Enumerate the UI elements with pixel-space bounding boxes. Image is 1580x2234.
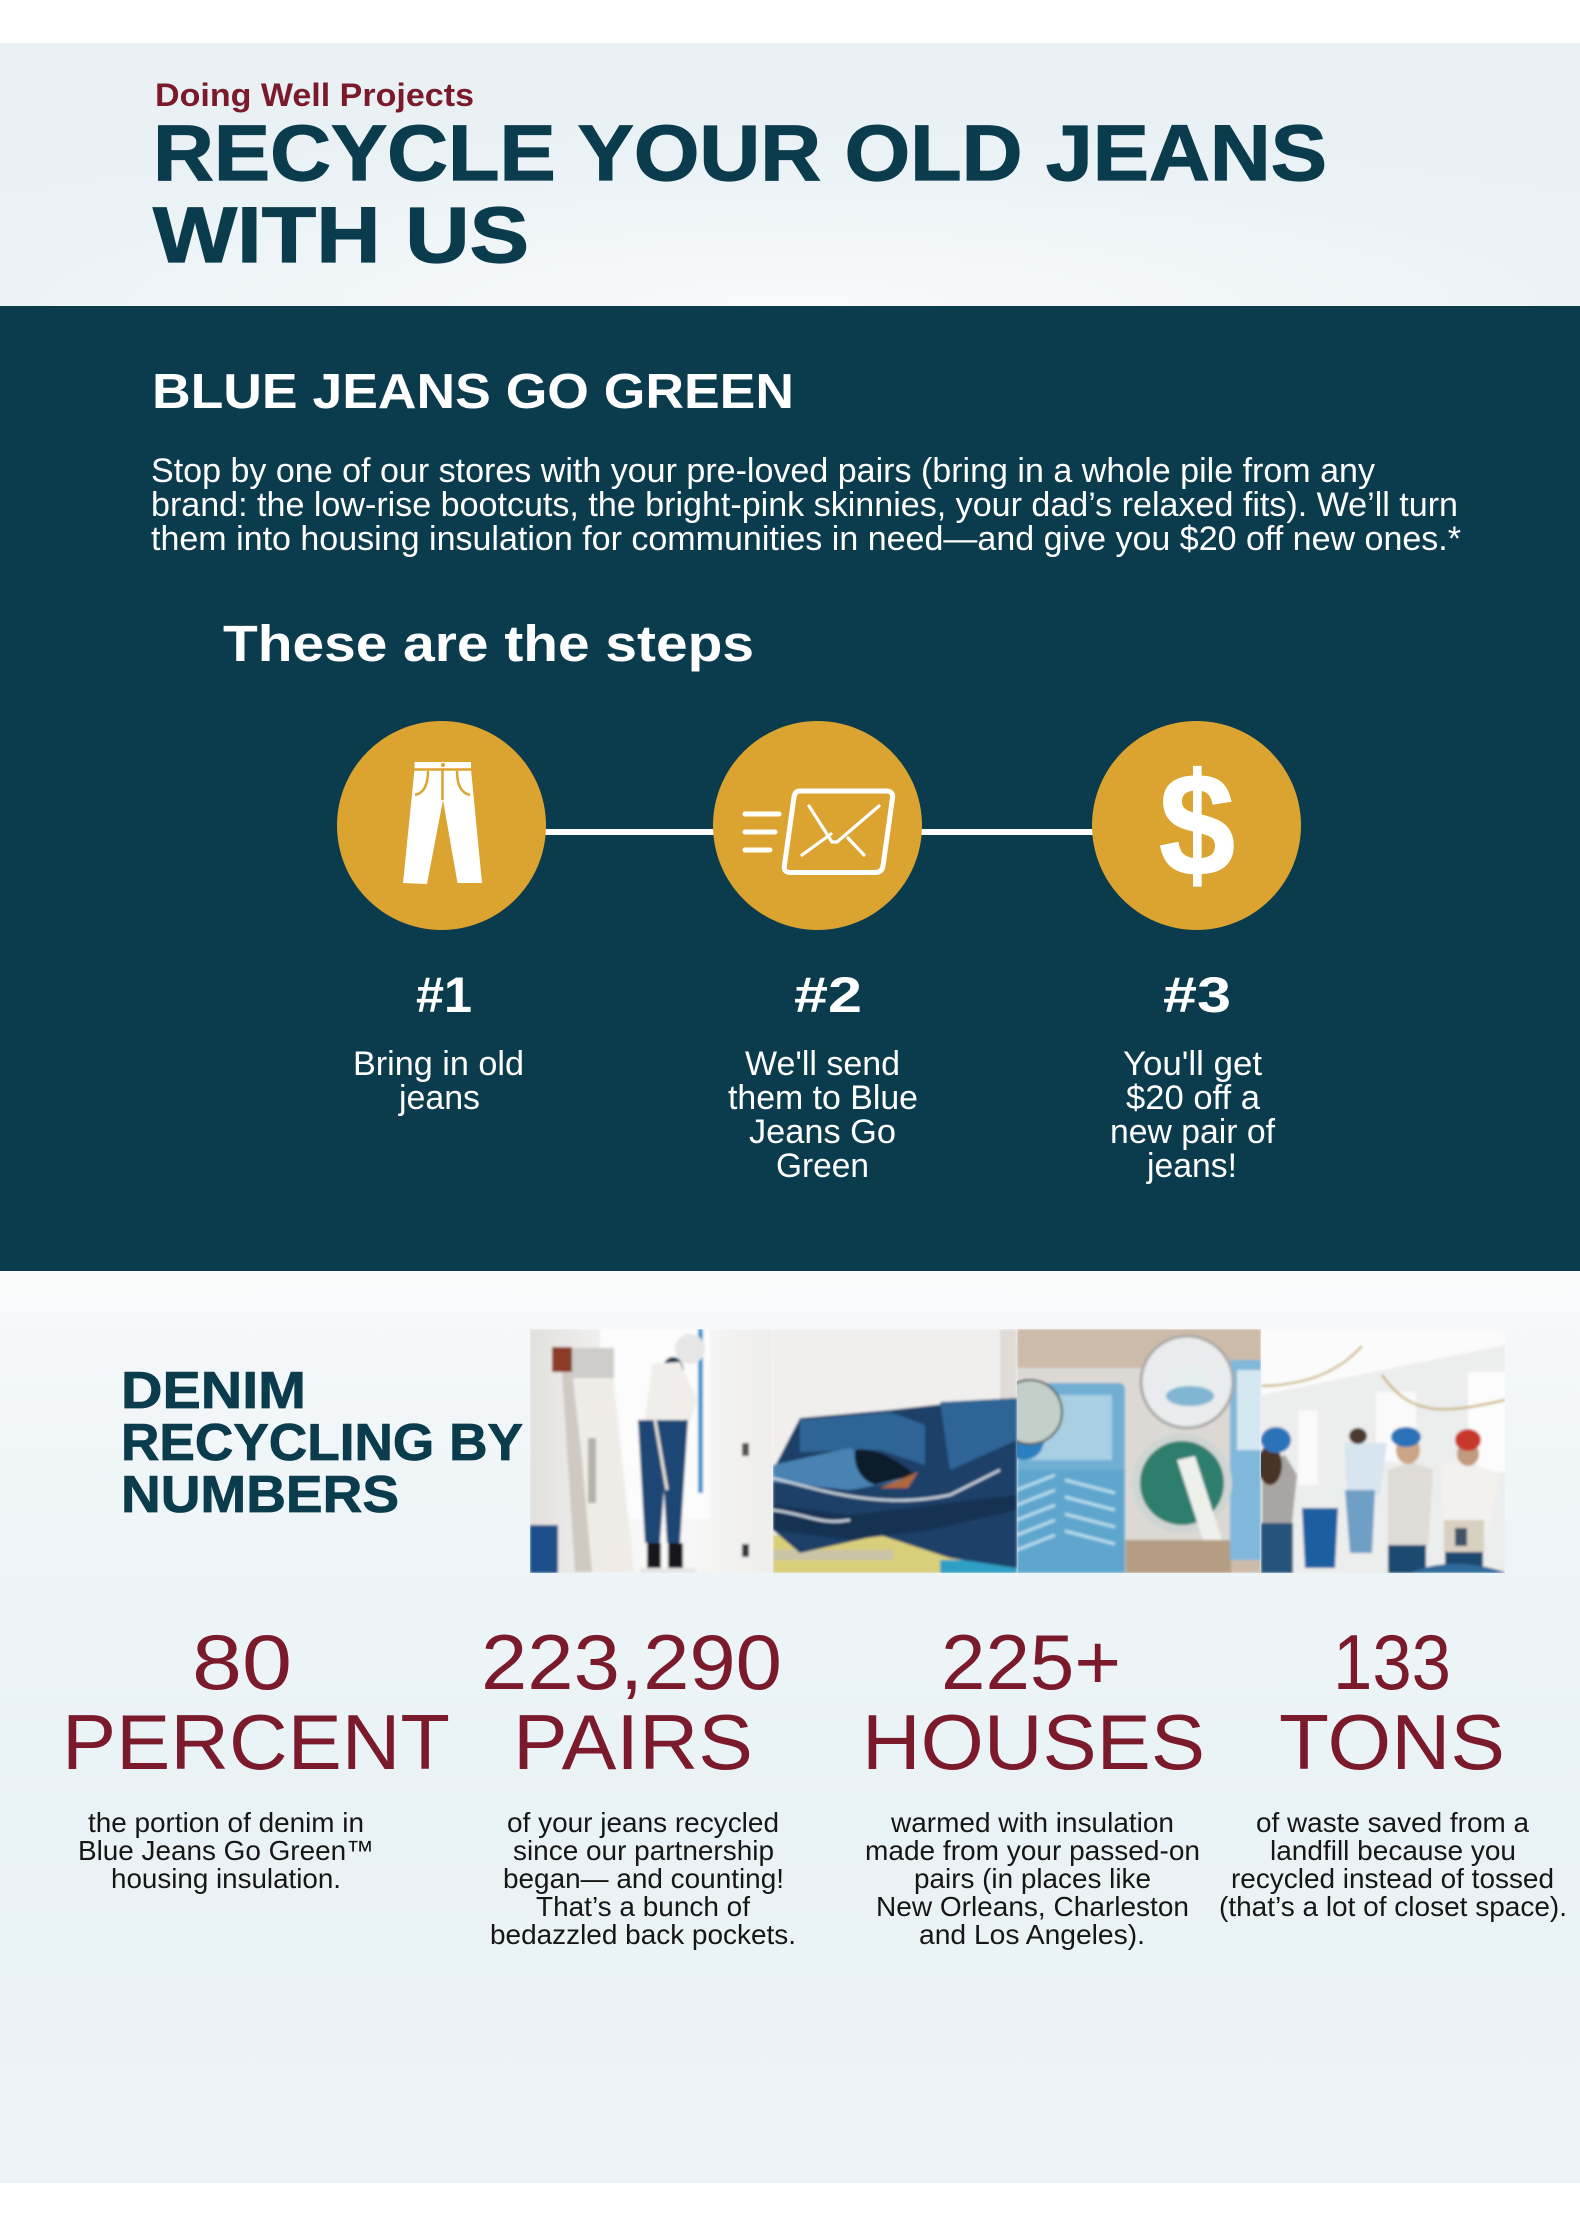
stat: 223,290 pairs: bedazzled back pockets.: [490, 1919, 796, 1950]
stat: 133 tons: of waste saved from a: [1256, 1807, 1529, 1838]
step 2: Jeans Go: [749, 1113, 896, 1151]
heading: These are the steps: These are the steps: [223, 615, 754, 672]
stat: 133 tons: recycled instead of tossed: [1231, 1863, 1554, 1894]
panel: header: [0, 43, 1580, 307]
connector line between steps: [540, 829, 1100, 835]
heading: Denim Recycling By Numbers: [121, 1362, 523, 1524]
photo: stack of folded jeans: [773, 1329, 1017, 1573]
stat: 225+ houses: 225+: [941, 1618, 1121, 1706]
heading: Denim Recycling By Numbers: RECYCLING BY: [121, 1414, 523, 1472]
step 1: jeans: [398, 1079, 480, 1117]
stat: 80 percent: housing insulation.: [111, 1863, 341, 1894]
stat: 223,290 pairs: [481, 1618, 796, 1950]
stat: 80 percent: PERCENT: [62, 1698, 450, 1786]
step 1: [353, 967, 524, 1117]
intro paragraph: them into housing insulation for communities in need—and give you $20 off new ones.*: [151, 520, 1461, 558]
photo: paint cans and trays: [998, 1329, 1261, 1573]
intro paragraph: Stop by one of our stores with your pre-loved pairs (bring in a whole pile from any: [151, 452, 1375, 490]
stat: 223,290 pairs: of your jeans recycled: [507, 1807, 779, 1838]
heading: Denim Recycling By Numbers: NUMBERS: [121, 1466, 399, 1524]
stat: 225+ houses: HOUSES: [862, 1698, 1205, 1786]
icon: envelope: [713, 721, 922, 930]
step 3: [1110, 967, 1276, 1185]
stat: 225+ houses: warmed with insulation: [890, 1807, 1174, 1838]
stat: 80 percent: 80: [192, 1618, 292, 1706]
icon: dollar sign: [1092, 721, 1301, 930]
stat: 80 percent: the portion of denim in: [88, 1807, 364, 1838]
stat: 225+ houses: [862, 1618, 1205, 1950]
icon: dollar sign: $: [1159, 743, 1235, 906]
heading: Denim Recycling By Numbers: DENIM: [121, 1362, 306, 1420]
stat: 223,290 pairs: 223,290: [481, 1618, 782, 1706]
step 3: jeans!: [1146, 1147, 1237, 1185]
step 2: #2: [794, 967, 862, 1023]
stat: 225+ houses: made from your passed-on: [865, 1835, 1200, 1866]
stat: 133 tons: [1219, 1618, 1567, 1922]
stat: 223,290 pairs: began— and counting!: [503, 1863, 784, 1894]
title: RECYCLE YOUR OLD JEANS: [153, 108, 1327, 197]
stat: 133 tons: 133: [1333, 1618, 1451, 1706]
panel: denim recycling by numbers: [0, 1271, 1580, 2183]
step 1: Bring in old: [353, 1045, 524, 1083]
stat: 80 percent: Blue Jeans Go Green™: [78, 1835, 374, 1866]
step 2: [728, 967, 918, 1185]
step 1: #1: [416, 967, 472, 1023]
step 3: new pair of: [1110, 1113, 1276, 1151]
stat: 133 tons: (that’s a lot of closet space).: [1219, 1891, 1567, 1922]
step 3: $20 off a: [1126, 1079, 1260, 1117]
step 2: them to Blue: [728, 1079, 918, 1117]
stat: 223,290 pairs: That’s a bunch of: [536, 1891, 750, 1922]
stat: 133 tons: TONS: [1279, 1698, 1505, 1786]
stat: 225+ houses: and Los Angeles).: [919, 1919, 1145, 1950]
stat: 223,290 pairs: PAIRS: [513, 1698, 753, 1786]
stat: 80 percent: [62, 1618, 450, 1894]
stat: 225+ houses: New Orleans, Charleston: [876, 1891, 1189, 1922]
photo: woman painting window frame: [530, 1329, 773, 1573]
icon: jeans: [337, 721, 546, 930]
step 3: #3: [1163, 967, 1231, 1023]
intro paragraph: brand: the low-rise bootcuts, the bright-pink skinnies, your dad’s relaxed fits). We’ll turn: [151, 486, 1458, 524]
photo: volunteers in hard hats: [1258, 1329, 1505, 1573]
step 2: Green: [776, 1147, 869, 1185]
title: [153, 108, 1327, 279]
eyebrow: Doing Well Projects: Doing Well Projects: [155, 77, 474, 113]
intro paragraph: [151, 452, 1461, 558]
heading: Blue Jeans Go Green: BLUE JEANS GO GREEN: [152, 365, 794, 419]
panel: Blue Jeans Go Green: [0, 306, 1580, 1271]
stat: 133 tons: landfill because you: [1270, 1835, 1516, 1866]
step 3: You'll get: [1123, 1045, 1263, 1083]
stat: 223,290 pairs: since our partnership: [513, 1835, 774, 1866]
step 2: We'll send: [745, 1045, 900, 1083]
title: WITH US: [153, 190, 529, 279]
stat: 225+ houses: pairs (in places like: [914, 1863, 1151, 1894]
